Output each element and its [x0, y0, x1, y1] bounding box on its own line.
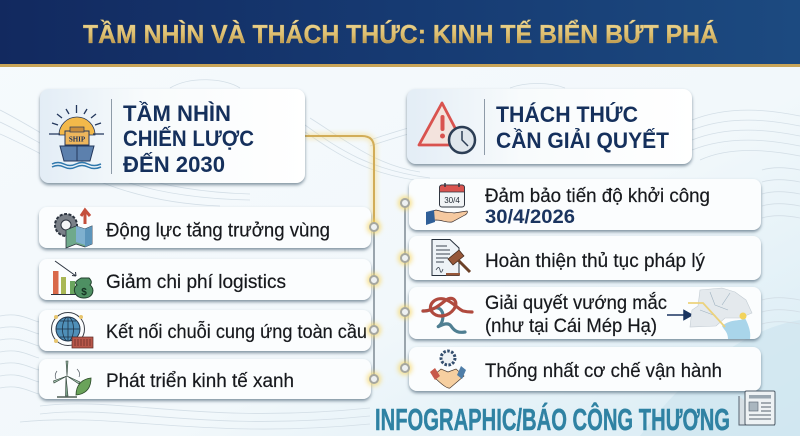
timeline nodes	[367, 196, 412, 386]
icon: calendar on hand: 30/4	[444, 196, 460, 205]
panel title: THÁCH THỨC	[496, 102, 638, 127]
panel title	[496, 102, 670, 153]
icon: ship and sun: SHIP	[69, 136, 86, 144]
panel: vision heading	[40, 89, 305, 183]
item: legal procedures	[409, 236, 761, 280]
icon: tangled knot	[423, 298, 472, 332]
panel title	[123, 101, 254, 177]
icon: newspaper	[739, 391, 775, 425]
icon: wind turbine and leaf	[54, 361, 91, 397]
arrow	[667, 310, 692, 320]
label: Đảm bảo tiến độ khởi công	[485, 186, 710, 207]
label: Hoàn thiện thủ tục pháp lý	[485, 251, 705, 272]
title: TẦM NHÌN VÀ THÁCH THỨC: KINH TẾ BIỂN BỨT PHÁ	[83, 19, 718, 49]
icon: warning and clock	[419, 103, 475, 153]
label: Phát triển kinh tế xanh	[106, 371, 294, 392]
date: 30/4/2026	[485, 207, 575, 228]
item: resolve obstacles	[409, 287, 761, 339]
panel: challenges heading	[407, 89, 692, 164]
item: start on schedule	[409, 179, 761, 230]
label: Thống nhất cơ chế vận hành	[485, 361, 722, 382]
map: Cái Mép Hạ	[688, 288, 752, 339]
label detail: (như tại Cái Mép Hạ)	[485, 316, 657, 337]
connector: left timeline	[305, 136, 374, 379]
panel title: CHIẾN LƯỢC	[123, 126, 254, 151]
item: logistics costs	[39, 259, 371, 300]
icon: calendar on hand	[426, 183, 467, 225]
icon: ship and sun	[49, 105, 104, 168]
item: regional growth	[39, 207, 371, 248]
icon: chart and money bag: $	[81, 287, 87, 298]
item: unified operating mechanism	[409, 347, 761, 391]
item: green economy	[39, 359, 371, 399]
panel title: CẦN GIẢI QUYẾT	[496, 128, 670, 153]
icon: globe and container	[52, 312, 93, 348]
label: Kết nối chuỗi cung ứng toàn cầu	[106, 321, 367, 343]
icon: chart and money bag	[51, 261, 93, 298]
panel title: TẦM NHÌN	[123, 101, 231, 126]
item: global supply chain	[39, 310, 371, 351]
connector: right timeline	[404, 203, 406, 368]
label: Giảm chi phí logistics	[106, 272, 286, 293]
icon: document and gavel	[432, 240, 470, 276]
label: Giải quyết vướng mắc	[485, 292, 667, 314]
icon: gear and handshake	[430, 351, 466, 388]
label: Động lực tăng trưởng vùng	[106, 220, 330, 242]
header banner	[0, 0, 800, 67]
icon: gear and map	[55, 210, 92, 248]
panel title: ĐẾN 2030	[123, 152, 225, 177]
